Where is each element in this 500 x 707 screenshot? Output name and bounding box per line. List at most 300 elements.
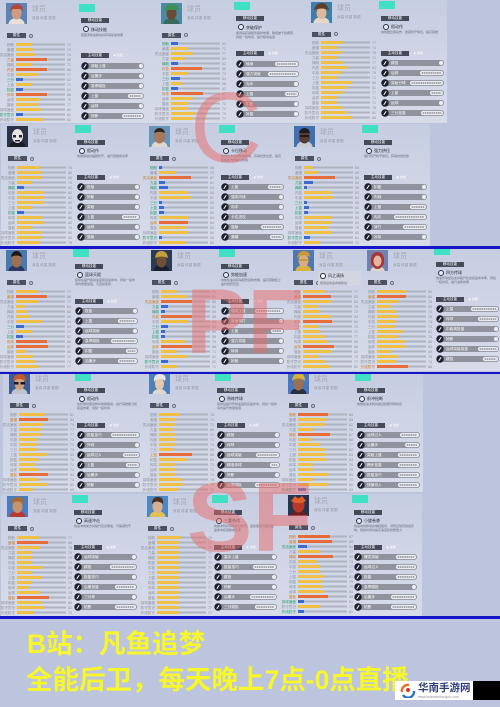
player card 6: 传球 [295, 216, 302, 220]
player card 7: 使用后提升移动速度和投篮命中，持续一段时间内效果加强，可连续使用 [75, 278, 135, 286]
skill panel: 运球 [87, 225, 94, 229]
player card 5: 上篮 [150, 206, 157, 210]
black corner block [473, 681, 500, 700]
player card 12: 移动技能 [224, 388, 238, 392]
position tag [79, 4, 95, 12]
player card 13: 灵活速度 [282, 422, 296, 426]
player card 6: 58 [355, 186, 359, 190]
player card 7: 69 [67, 314, 71, 318]
player card 2: 79 [222, 112, 226, 116]
position tag [212, 495, 228, 503]
player card 11: 83 [70, 452, 74, 456]
player card 10: 76 [428, 354, 432, 358]
player card 15: 77 [208, 586, 212, 590]
player card 8: 篮板 [152, 350, 159, 354]
skill panel: 后撤步 [91, 74, 102, 78]
player card 10: 内投 [368, 314, 375, 318]
player card 16: 属性 [295, 525, 302, 529]
player card 5: 篮板 [150, 226, 157, 230]
player card 2: 72 [222, 47, 226, 51]
player card 6: 主动技能 [371, 174, 385, 178]
skill panel [219, 249, 284, 365]
player card 1: 移动技能 [88, 18, 102, 22]
player card 14: 传球 [8, 586, 15, 590]
player card 2: 球员 [187, 6, 201, 12]
player card 1: 71 [67, 42, 71, 46]
player card 8: 86 [212, 300, 216, 304]
player card 8: 82 [212, 320, 216, 324]
player card 6: 持球速度 [288, 230, 302, 234]
player card 16: 64 [349, 544, 353, 548]
player card 1 [0, 0, 150, 123]
player card 3: 力量 [312, 56, 319, 60]
player card 7: 内投 [7, 314, 14, 318]
player card 3: 扣篮 [312, 86, 319, 90]
player card 1: 71 [67, 62, 71, 66]
skill panel: 抢断 [364, 605, 371, 609]
player card 15: 77 [208, 540, 212, 544]
icon: logo [400, 684, 416, 698]
player card 3: 71 [372, 46, 376, 50]
player card 6: 盖帽 [295, 170, 302, 174]
player card 7: 力量 [7, 304, 14, 308]
watermark [395, 681, 500, 700]
player card 10: 主动技能 [443, 296, 457, 300]
skill panel: 投篮技巧 [84, 575, 99, 579]
player card 12: 71 [210, 462, 214, 466]
stat panel [321, 41, 370, 121]
player card 4: 扣篮 [8, 210, 15, 214]
player card 3: 上篮 [312, 81, 319, 85]
player card 10: 抢断 [368, 290, 375, 294]
player card 12: 上篮 [150, 452, 157, 456]
player card 2: 62 [222, 42, 226, 46]
player card 15: 77 [208, 546, 212, 550]
player card 12: 中投 [150, 442, 157, 446]
player card 6: 球员 [320, 129, 334, 136]
player card 10: 74 [428, 310, 432, 314]
player card 2: 持球速度 [155, 107, 169, 111]
player card 10: 运球 [368, 344, 375, 348]
player card 11: 中投 [10, 442, 17, 446]
player card 8: 传球 [152, 340, 159, 344]
player card 11: 运球 [10, 468, 17, 472]
player card 9: 80 [354, 340, 358, 344]
player card 12: 使用后提升传球速度和投篮命中，持续一段时间内提升效果加强 [217, 402, 277, 410]
player card 4: 假动作 [87, 148, 99, 153]
player card 8: 86 [212, 314, 216, 318]
player card 6: 防守意识 [288, 236, 302, 240]
player card 10: 传球 [368, 340, 375, 344]
player card 9: 77 [354, 334, 358, 338]
player card 8: 59 [212, 334, 216, 338]
player card 3: 主动技能 [388, 50, 402, 54]
player card 5: 外线防守 [143, 240, 157, 244]
player card 14: 67 [68, 586, 72, 590]
player card 1: 弹跳 [7, 62, 14, 66]
skill panel: 上篮 [87, 463, 94, 467]
skill panel: 扣篮 [374, 185, 381, 189]
skill panel: 背打 [374, 225, 381, 229]
stat panel [16, 290, 65, 370]
player card 14: 灵活速度 [1, 546, 15, 550]
player card 9: 持球速度 [287, 354, 301, 358]
player card 3: 假动作 [391, 24, 403, 29]
player card 13: 83 [349, 458, 353, 462]
player card 3: 86 [372, 116, 376, 120]
skill panel: 上篮 [91, 94, 98, 98]
position letters PF: PF [186, 271, 304, 373]
skill panel: 三分投篮 [391, 111, 406, 115]
player card 14: 弹跳 [8, 556, 15, 560]
player card 15 [141, 494, 282, 616]
player card 10: 74 [428, 320, 432, 324]
player card 10: 篮板 [368, 350, 375, 354]
player card 16: 77 [349, 550, 353, 554]
player card 4: 70 [68, 226, 72, 230]
player card 4: 80 [68, 216, 72, 220]
player card 15: 持球速度 [141, 600, 155, 604]
player card 7: 66 [67, 310, 71, 314]
portrait [288, 374, 309, 394]
player card 11: 81 [70, 412, 74, 416]
portrait [149, 126, 170, 147]
player card 16: 79 [349, 584, 353, 588]
player card 14: 77 [68, 536, 72, 540]
portrait [151, 250, 172, 271]
player card 16: 灵活速度 [282, 544, 296, 548]
skill panel: 传球 [446, 317, 453, 321]
player card 7: 64 [67, 304, 71, 308]
player card 13: 持球速度 [282, 478, 296, 482]
player card 16: 球员 [314, 498, 328, 505]
player card 7: 篮球天赋 [85, 272, 101, 277]
player card 1: 82 [67, 118, 71, 122]
player card 15: 篮板 [148, 596, 155, 600]
player card 4 [1, 124, 143, 246]
player card 10: 防守意识 [361, 360, 375, 364]
player card 15: 中投 [148, 566, 155, 570]
player card 11: 77 [70, 432, 74, 436]
player card 9: 中投 [294, 320, 301, 324]
player card 6: 上篮 [295, 206, 302, 210]
player card 16: 移动技能 [361, 510, 375, 514]
player card 12: 外线防守 [143, 488, 157, 492]
player card 2: 77 [222, 52, 226, 56]
skill panel: 突破 [87, 205, 94, 209]
player card 15: 向前冲刺并带球穿过防守，连续使用可提高投篮命中和突破成功率 [214, 524, 274, 532]
player card 3: 篮板 [312, 101, 319, 105]
skill panel: 抢断 [87, 195, 94, 199]
player card 13: 63 [349, 488, 353, 492]
player card 14: 扣篮 [8, 580, 15, 584]
player card 5: 84 [210, 220, 214, 224]
player card 2: 72 [222, 102, 226, 106]
player card 16: 77 [349, 604, 353, 608]
player card 12: 78 [210, 478, 214, 482]
player card 7: 86 [67, 340, 71, 344]
player card 8: 盖帽 [152, 294, 159, 298]
player card 16: 61 [349, 600, 353, 604]
player card 14: 力量 [8, 550, 15, 554]
player card 4: 球员 [33, 129, 47, 136]
player card 11: 传球 [10, 462, 17, 466]
player card 10: 中投 [368, 320, 375, 324]
skill panel: 转身 [246, 62, 253, 66]
player card 11: 73 [70, 438, 74, 442]
player card 3: 81 [372, 111, 376, 115]
player card 10: 69 [428, 304, 432, 308]
skill panel: 运球 [91, 104, 98, 108]
skill panel: 跳投 [84, 565, 91, 569]
player card 14: 防守意识 [1, 606, 15, 610]
player card 11: 84 [70, 418, 74, 422]
player card 3: 71 [372, 101, 376, 105]
player card 16: 上篮 [289, 574, 296, 578]
player card 13: 上篮 [289, 452, 296, 456]
player card 4: 内投 [8, 190, 15, 194]
player card 4: 篮板 [8, 226, 15, 230]
player card 14: 80 [68, 566, 72, 570]
skill panel: 强攻上篮 [231, 309, 246, 313]
popup: skill note [318, 271, 363, 285]
player card 14: 移动技能 [81, 510, 95, 514]
player card 5: 卡位移动 [231, 148, 247, 153]
player card 9: 灵活速度 [287, 300, 301, 304]
player card 5: 球员 [175, 129, 189, 136]
skill panel: 投篮 [87, 185, 94, 189]
player card 5: 61 [210, 180, 214, 184]
skill panel: 后撤步 [224, 595, 235, 599]
player card 10: 身高 体重 数据 [393, 263, 417, 267]
player card 1: 抢断 [7, 42, 14, 46]
player card 8: 移动技能 [228, 264, 242, 268]
player card 11: 84 [70, 472, 74, 476]
player card 7: 扣篮 [7, 334, 14, 338]
player card 12: 身高 体重 数据 [175, 386, 199, 390]
player card 7: 主动技能 [82, 298, 96, 302]
stat panel [377, 290, 426, 370]
player card 6: 83 [355, 190, 359, 194]
player card 1: 防守意识 [0, 112, 14, 116]
player card 12: 内投 [150, 438, 157, 442]
player card 2: 使用后获得短暂保护效果，降低被干扰概率，持续一段时间，提升移动速度 [236, 30, 296, 38]
player card 15: 盖帽 [148, 540, 155, 544]
player card 6: 外线防守 [288, 240, 302, 244]
player card 14: 上篮 [8, 576, 15, 580]
player card 12: 运球 [150, 468, 157, 472]
player card 15: 79 [208, 536, 212, 540]
player card 10: 扣篮 [368, 334, 375, 338]
skill panel: 传球 [227, 443, 234, 447]
position tag [72, 495, 88, 503]
player card 10: 持球速度 [361, 354, 375, 358]
player card 16: 87 [349, 534, 353, 538]
player card 7: 上篮 [7, 330, 14, 334]
player card 7: 球员 [32, 253, 46, 260]
player card 3: 弹跳 [312, 61, 319, 65]
player card 10: 灵活速度 [361, 300, 375, 304]
player card 1: 盖帽 [7, 48, 14, 52]
skill panel: 后仰 [391, 71, 398, 75]
player card 16: 防守意识 [282, 604, 296, 608]
skill panel: 后撤步 [367, 443, 378, 447]
player card 4: 中投 [8, 196, 15, 200]
player card 15: 弹跳 [148, 556, 155, 560]
player card 4: 外线防守 [1, 240, 15, 244]
portrait [288, 495, 309, 516]
player card 6: 64 [355, 166, 359, 170]
player card 2: 弹跳 [162, 62, 169, 66]
player card 3: 76 [372, 51, 376, 55]
skill panel: 扣篮 [85, 349, 92, 353]
player card 10 [361, 249, 500, 371]
player card 5: 58 [210, 236, 214, 240]
player card 15: 抢断 [148, 536, 155, 540]
skill panel: 跳投 [446, 357, 453, 361]
player card 6: 69 [355, 170, 359, 174]
player card 6: 84 [355, 196, 359, 200]
player card 1: 属性 [13, 33, 20, 37]
player card 5: 87 [210, 176, 214, 180]
player card 2: 66 [222, 82, 226, 86]
player card 4: 78 [68, 240, 72, 244]
player card 2: 外线防守 [155, 117, 169, 121]
player card 14: 身高 体重 数据 [33, 509, 57, 513]
position tag [73, 249, 89, 257]
player card 2: 突破保护 [246, 24, 262, 30]
player card 2: 72 [222, 107, 226, 111]
position tag [379, 1, 395, 9]
skill panel [362, 125, 427, 241]
player card 9: 83 [354, 350, 358, 354]
skill panel: 强攻内线 [231, 195, 246, 199]
popup: skill note: 使用后快速向前移动 [320, 280, 347, 284]
skill panel: 跳投 [227, 433, 234, 437]
skill panel: 卡位进攻 [231, 215, 246, 219]
skill panel: 突破上篮 [91, 64, 106, 68]
player card 13: 弹跳 [289, 432, 296, 436]
stat panel [17, 536, 66, 616]
player card 15: 77 [208, 570, 212, 574]
player card 3: 76 [372, 106, 376, 110]
player card 4: 80 [68, 230, 72, 234]
player card 5: 82 [210, 240, 214, 244]
player card 7: 运球 [7, 344, 14, 348]
player card 4: 80 [68, 236, 72, 240]
player card 5: 72 [210, 170, 214, 174]
player card 11: 83 [70, 482, 74, 486]
player card 12: 防守意识 [143, 482, 157, 486]
player card 11: 73 [70, 442, 74, 446]
skill panel: 高手上篮 [224, 555, 239, 559]
player card 10: 81 [428, 330, 432, 334]
player card 11: 属性 [16, 403, 23, 407]
player card 2: 灵活速度 [155, 52, 169, 56]
player card 4: 防守意识 [1, 236, 15, 240]
skill panel: 跳投 [391, 61, 398, 65]
player card 11: 上篮 [10, 452, 17, 456]
player card 15: 上篮 [148, 576, 155, 580]
player card 3: 球员 [337, 4, 351, 12]
skill panel: 运球突破投篮 [446, 347, 468, 351]
player card 15: 外线防守 [141, 610, 155, 614]
player card 12: 71 [210, 472, 214, 476]
skill panel [355, 374, 420, 489]
position tag [434, 247, 450, 255]
player card 7: 抢断 [7, 290, 14, 294]
skill panel: 投篮技巧 [224, 565, 239, 569]
player card 11: 盖帽 [10, 418, 17, 422]
player card 6 [288, 124, 430, 246]
player card 12: 球员 [175, 376, 189, 383]
player card 5: 87 [210, 196, 214, 200]
player card 11: 防守意识 [3, 482, 17, 486]
player card 2: 传球 [162, 92, 169, 96]
position tag [355, 373, 371, 381]
player card 7: 防守意识 [0, 360, 14, 364]
player card 4: 78 [68, 166, 72, 170]
skill panel: 中距离投篮 [446, 327, 464, 331]
player card 12: 扣篮 [150, 458, 157, 462]
player card 6: 属性 [301, 156, 308, 160]
player card 13: 68 [349, 438, 353, 442]
player card 5: 传球 [150, 216, 157, 220]
player card 11: 73 [70, 448, 74, 452]
player card 1: 62 [67, 88, 71, 92]
player card 3: 三分 [312, 76, 319, 80]
skill panel: 上篮 [85, 319, 92, 323]
player card 4: 灵活速度 [1, 176, 15, 180]
portrait [311, 2, 332, 23]
player card 13: 外线防守 [282, 488, 296, 492]
player card 1: 持球速度 [0, 108, 14, 112]
player card 5: 内投 [150, 190, 157, 194]
skill panel: 外线 [87, 443, 94, 447]
player card 8: 球员 [177, 253, 191, 260]
player card 1: 球员 [32, 6, 46, 13]
player card 1: 灵活速度 [0, 52, 14, 56]
player card 6: 力量 [295, 180, 302, 184]
player card 4: 62 [68, 210, 72, 214]
stat panel [19, 412, 68, 492]
player card 16: 79 [349, 580, 353, 584]
player card 12: 三分 [150, 448, 157, 452]
player card 10: 73 [428, 324, 432, 328]
player card 4: 82 [68, 196, 72, 200]
player card 13: 盖帽 [289, 418, 296, 422]
player card 10: 76 [428, 314, 432, 318]
player card 1: 71 [67, 82, 71, 86]
skill panel: 抢断 [91, 114, 98, 118]
player card 14: 快速冲向前方并提升自身爆发，可躲避防守 [74, 524, 131, 528]
caption line 2: 全能后卫，每天晚上7点-0点直播 [26, 665, 409, 695]
player card 10: 84 [428, 290, 432, 294]
player card 7: 65 [67, 350, 71, 354]
player card 11: 球员 [35, 376, 49, 383]
player card 2: 内投 [162, 67, 169, 71]
blue divider 3 [0, 616, 500, 619]
player card 15: 77 [208, 600, 212, 604]
skill panel: 急停跳投 [364, 585, 379, 589]
player card 1: 86 [67, 68, 71, 72]
player card 8: 运球 [152, 344, 159, 348]
player card 14: 80 [68, 600, 72, 604]
player card 3: 中投 [312, 71, 319, 75]
player card 5: 中投 [150, 196, 157, 200]
skill panel: 抢板 [231, 359, 238, 363]
skill panel: 勾手 [231, 205, 238, 209]
